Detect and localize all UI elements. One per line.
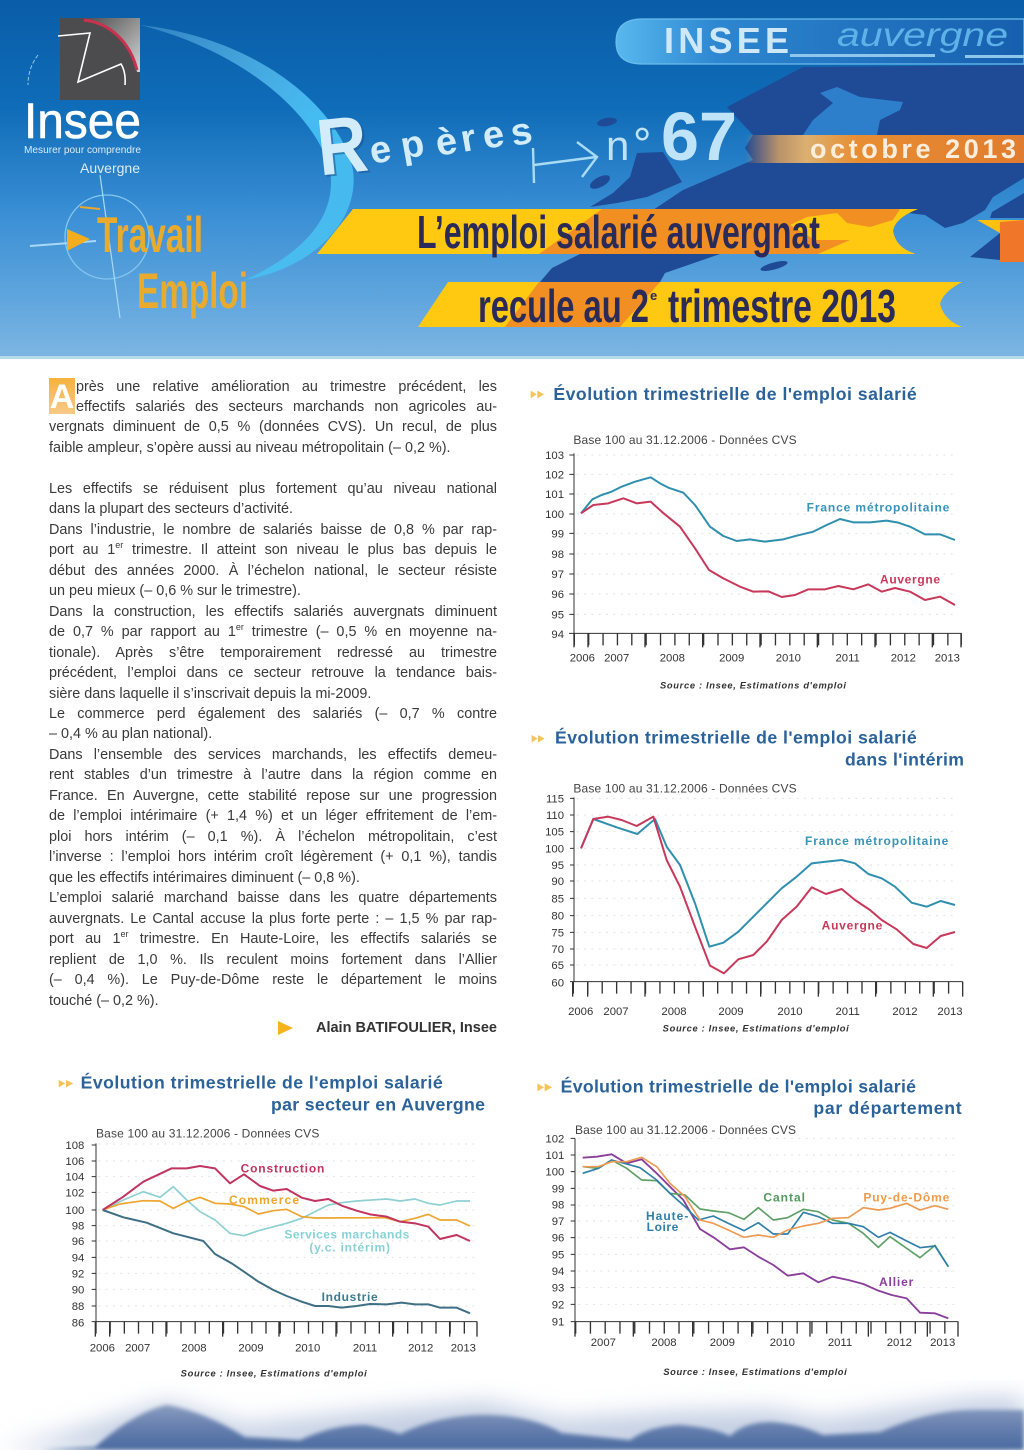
article text: touché (– 0,2 %).: [49, 993, 159, 1009]
label Haute-Loire: [646, 1209, 688, 1234]
y axis labels: 65: [551, 960, 564, 972]
article text: port au 1er trimestre. Il atteint son niveau le plus bas depuis le: [49, 540, 497, 558]
label Haute-Loire: Loire: [647, 1220, 679, 1234]
y axis labels: 99: [551, 528, 564, 540]
y axis labels: 105: [545, 827, 564, 839]
line: Cantal: [583, 1160, 948, 1267]
y axis labels: 75: [551, 927, 564, 939]
article text: dans la plupart des secteurs d’activité.: [49, 501, 293, 517]
line: Haute-Loire: [583, 1160, 948, 1267]
light arc swoosh: [140, 25, 354, 280]
line: Allier: [583, 1154, 948, 1318]
source: Source : Insee, Estimations d'emploi: [663, 1367, 847, 1377]
base note: Base 100 au 31.12.2006 - Données CVS: [573, 433, 797, 447]
x axis labels: 2006: [568, 1006, 593, 1018]
y axis labels: 104: [65, 1172, 84, 1184]
article text: tionale). Après s’être temporairement redressé au trimestre: [49, 645, 497, 661]
article text: précédent, l’emploi dans ce secteur retrouve la tendance bais-: [49, 665, 497, 681]
x axis labels: 2007: [591, 1337, 616, 1349]
y axis labels: 100: [65, 1205, 84, 1217]
article text: ploi hors intérim (– 0,1 %). À l’échelon métropolitain, c’est: [49, 829, 497, 845]
map shape: [540, 65, 1024, 282]
y axis labels: 110: [546, 810, 564, 822]
article text: un peu mieux (– 0,6 % sur le trimestre).: [49, 583, 301, 599]
article text: rent stables d’un trimestre à l’autre dans la région comme en: [49, 767, 497, 783]
y axis labels: 80: [551, 911, 564, 923]
x axis labels: 2009: [719, 652, 744, 664]
title ribbon line 2: e: [650, 288, 657, 303]
x axis labels: 2007: [604, 652, 629, 664]
line: Puy-de-Dôme: [583, 1157, 948, 1237]
article text: l’inverse : l’emploi hors intérim croît légèrement (+ 0,1 %), tandis: [49, 849, 497, 865]
y axis labels: 100: [545, 1167, 564, 1179]
y axis labels: 98: [551, 549, 564, 561]
y axis labels: 99: [552, 1183, 564, 1195]
y axis labels: [545, 793, 564, 989]
Insee logo: Insee: [24, 93, 141, 149]
label Construction: Construction: [241, 1162, 324, 1176]
y axis labels: 102: [65, 1187, 84, 1199]
y axis labels: 86: [72, 1317, 84, 1329]
heading: Évolution trimestrielle de l'emploi salarié: [553, 383, 917, 404]
Repères n°67: 67: [661, 98, 737, 175]
line: Industrie: [103, 1210, 470, 1313]
heading: [537, 1075, 962, 1118]
y axis labels: 94: [551, 629, 564, 641]
article text: près une relative amélioration au trimestre précédent, les: [76, 378, 497, 394]
x axis labels: 2011: [835, 652, 860, 664]
y axis labels: 95: [551, 609, 564, 621]
y axis labels: 93: [552, 1283, 564, 1295]
x axis labels: 2006: [90, 1342, 115, 1354]
title ribbon line 2: [418, 280, 962, 332]
Insee logo: Auvergne: [80, 161, 140, 176]
line: Construction: [103, 1166, 470, 1241]
Repères n°67: n: [606, 122, 629, 169]
article text: auvergnats. Le Cantal accuse la plus forte perte : – 1,5 % par rap-: [49, 911, 497, 927]
x axis labels: [90, 1342, 476, 1354]
label France: France métropolitaine: [805, 834, 949, 848]
article text: Dans la construction, les effectifs salariés auvergnats diminuent: [49, 604, 497, 620]
article text: Dans l’ensemble des services marchands, les effectifs demeu-: [49, 747, 497, 763]
label Cantal: Cantal: [763, 1191, 805, 1205]
y axis labels: 90: [551, 876, 564, 888]
label Haute-Loire: Haute-: [646, 1209, 688, 1223]
y axis labels: 102: [545, 469, 564, 481]
source: Source : Insee, Estimations d'emploi: [660, 680, 846, 690]
y axis labels: 85: [551, 893, 564, 905]
article text: faible ampleur, s’opère aussi au niveau métropolitain (– 0,2 %).: [49, 440, 451, 456]
x axis labels: 2011: [828, 1337, 852, 1349]
line: Services marchands: [103, 1187, 470, 1236]
y axis labels: 90: [72, 1284, 84, 1296]
x axis labels: 2009: [238, 1342, 264, 1354]
y axis labels: 98: [72, 1221, 84, 1233]
x axis labels: 2010: [295, 1342, 320, 1354]
heading: par secteur en Auvergne: [271, 1095, 485, 1115]
date banner: octobre 2013: [810, 134, 1016, 164]
y axis labels: 108: [65, 1140, 84, 1152]
y axis labels: 60: [551, 977, 564, 989]
title ribbon line 1: L’emploi salarié auvergnat: [417, 206, 820, 258]
y axis labels: 91: [552, 1317, 564, 1329]
x axis labels: 2012: [887, 1337, 912, 1349]
y axis labels: 115: [546, 793, 564, 805]
drop cap: A: [50, 378, 74, 416]
line: France métropolitaine: [581, 819, 955, 947]
y axis labels: 96: [551, 589, 564, 601]
x axis labels: 2006: [570, 652, 595, 664]
article text: Le commerce perd également des salariés (– 0,7 % contre: [49, 706, 497, 722]
article text: Les effectifs se réduisent plus fortement qu’au niveau national: [49, 481, 497, 497]
INSEE auvergne pill: INSEE: [664, 20, 789, 61]
x axis labels: 2013: [930, 1337, 955, 1349]
title ribbon line 2: trimestre 2013: [668, 280, 896, 332]
y axis labels: 92: [552, 1299, 564, 1311]
axes: [570, 797, 963, 997]
y axis labels: 100: [545, 509, 564, 521]
author: Alain BATIFOULIER, Insee: [316, 1020, 497, 1036]
x axis labels: 2010: [776, 652, 801, 664]
x axis labels: [591, 1337, 955, 1349]
article text: que les effectifs intérimaires diminuent (– 0,8 %).: [49, 870, 360, 886]
Travail Emploi theme logo: [30, 175, 248, 319]
axes: [571, 1138, 959, 1337]
x axis labels: 2010: [777, 1006, 803, 1018]
y axis labels: 97: [551, 569, 564, 581]
x axis labels: [570, 652, 960, 664]
article text: – 0,4 % au plan national).: [49, 726, 212, 742]
right ribbon fragment: [977, 220, 1024, 262]
Repères n°67: R: [315, 100, 374, 194]
y axis labels: 92: [72, 1268, 84, 1280]
article text: sière dans laquelle il s’inscrivait depuis la mi-2009.: [49, 686, 371, 702]
y axis labels: 96: [72, 1236, 84, 1248]
x axis labels: 2013: [451, 1342, 476, 1354]
source: Source : Insee, Estimations d'emploi: [181, 1369, 367, 1379]
source: Source : Insee, Estimations d'emploi: [663, 1024, 849, 1034]
y axis labels: 95: [552, 1249, 564, 1261]
footer mountains: [16, 1386, 1024, 1450]
article text: port au 1er trimestre. En Haute-Loire, les effectifs salariés se: [49, 929, 497, 947]
y axis labels: [545, 1133, 564, 1329]
Repères n°67: R: [313, 99, 372, 192]
header banner: [0, 0, 1024, 359]
heading: Évolution trimestrielle de l'emploi salarié: [81, 1071, 443, 1092]
article text: début des années 2000. À l’échelon national, le secteur résiste: [49, 563, 497, 579]
y axis labels: 101: [545, 1150, 564, 1162]
x axis labels: 2011: [835, 1006, 860, 1018]
x axis labels: 2011: [353, 1342, 377, 1354]
y axis labels: 101: [545, 489, 564, 501]
line: France métropolitaine: [581, 477, 955, 542]
INSEE auvergne pill: auvergne: [837, 16, 1008, 53]
axes: [92, 1143, 478, 1337]
heading: Évolution trimestrielle de l'emploi salarié: [555, 726, 917, 747]
article text: Dans l’industrie, le nombre de salariés baisse de 0,8 % par rap-: [49, 522, 497, 538]
panel: chart temporary employment: [532, 726, 964, 1034]
y axis labels: 96: [552, 1233, 564, 1245]
panel: chart by department: [537, 1075, 962, 1377]
Repères n°67: [313, 98, 737, 194]
y axis labels: 100: [545, 843, 564, 855]
y axis labels: [545, 450, 564, 641]
article text: effectifs salariés des secteurs marchands non agricoles au-: [76, 399, 497, 415]
heading: dans l'intérim: [845, 750, 964, 770]
x axis labels: 2007: [603, 1006, 629, 1018]
article text: L’emploi salarié marchand baisse dans les quatre départements: [49, 890, 497, 906]
x axis labels: 2012: [892, 1006, 918, 1018]
base note: Base 100 au 31.12.2006 - Données CVS: [573, 782, 797, 796]
heading: [59, 1071, 485, 1115]
article text: replient de 1,0 %. Ils reculent moins fortement dans l’Allier: [49, 952, 497, 968]
x axis labels: 2012: [408, 1342, 433, 1354]
x axis labels: 2008: [651, 1337, 677, 1349]
article text: [49, 378, 497, 1009]
Travail Emploi theme logo: Emploi: [137, 263, 248, 319]
line: Commerce: [103, 1197, 470, 1226]
y axis labels: 98: [552, 1199, 564, 1211]
y axis labels: 103: [545, 450, 564, 462]
x axis labels: 2008: [181, 1342, 207, 1354]
line: Auvergne: [581, 498, 955, 605]
label Industrie: Industrie: [322, 1290, 378, 1304]
label Services marchands: Services marchands: [284, 1227, 410, 1241]
x axis labels: 2008: [660, 652, 685, 664]
axes: [569, 453, 962, 647]
base note: Base 100 au 31.12.2006 - Données CVS: [96, 1126, 319, 1140]
base note: Base 100 au 31.12.2006 - Données CVS: [575, 1123, 796, 1137]
label Services marchands: (y.c. intérim): [309, 1240, 390, 1254]
Repères n°67: °: [633, 118, 651, 170]
Travail Emploi theme logo: Travail: [97, 207, 203, 263]
x axis labels: 2012: [891, 652, 916, 664]
label France: France métropolitaine: [807, 501, 950, 515]
label Puy-de-Dôme: Puy-de-Dôme: [863, 1191, 950, 1205]
label Commerce: Commerce: [229, 1193, 299, 1207]
y axis labels: 95: [551, 860, 564, 872]
x axis labels: 2009: [710, 1337, 735, 1349]
x axis labels: 2013: [937, 1006, 963, 1018]
heading: par département: [813, 1098, 962, 1118]
label Allier: Allier: [879, 1275, 914, 1289]
panel: chart by sector: [58, 1071, 485, 1379]
article text: de l’emploi intérimaire (+ 1,4 %) et un léger effritement de l’em-: [49, 808, 497, 824]
label Auvergne: Auvergne: [880, 572, 940, 586]
INSEE auvergne pill: [616, 16, 1024, 64]
x axis labels: 2009: [718, 1006, 744, 1018]
article text: France. En Auvergne, cette stabilité repose sur une progression: [49, 788, 497, 804]
panel: chart employment quarterly: [530, 383, 962, 690]
article text: vergnats diminuent de 0,5 % (données CVS). Un recul, de plus: [49, 419, 497, 435]
label Services marchands: [284, 1227, 410, 1254]
Repères n°67: epères: [366, 110, 535, 173]
heading: Évolution trimestrielle de l'emploi salarié: [561, 1075, 916, 1096]
y axis labels: 102: [545, 1133, 564, 1145]
y axis labels: 88: [72, 1301, 84, 1313]
y axis labels: 94: [72, 1252, 84, 1264]
line: Auvergne: [581, 817, 955, 973]
article text: (– 0,4 %). Le Puy-de-Dôme reste le département le moins: [49, 972, 497, 988]
Insee logo: [24, 18, 141, 176]
title ribbon line 2: recule au 2: [478, 280, 649, 332]
Insee logo: Mesurer pour comprendre: [24, 144, 141, 156]
x axis labels: [568, 1006, 963, 1018]
y axis labels: 70: [551, 944, 564, 956]
heading: [532, 726, 964, 770]
y axis labels: 94: [552, 1266, 564, 1278]
label Auvergne: Auvergne: [822, 918, 883, 932]
x axis labels: 2010: [770, 1337, 795, 1349]
y axis labels: [65, 1140, 84, 1329]
x axis labels: 2013: [935, 652, 960, 664]
x axis labels: 2008: [661, 1006, 687, 1018]
y axis labels: 97: [552, 1216, 564, 1228]
y axis labels: 106: [65, 1156, 84, 1168]
x axis labels: 2007: [125, 1342, 150, 1354]
article text: de 0,7 % par rapport au 1er trimestre (– 0,5 % en moyenne na-: [49, 622, 497, 640]
